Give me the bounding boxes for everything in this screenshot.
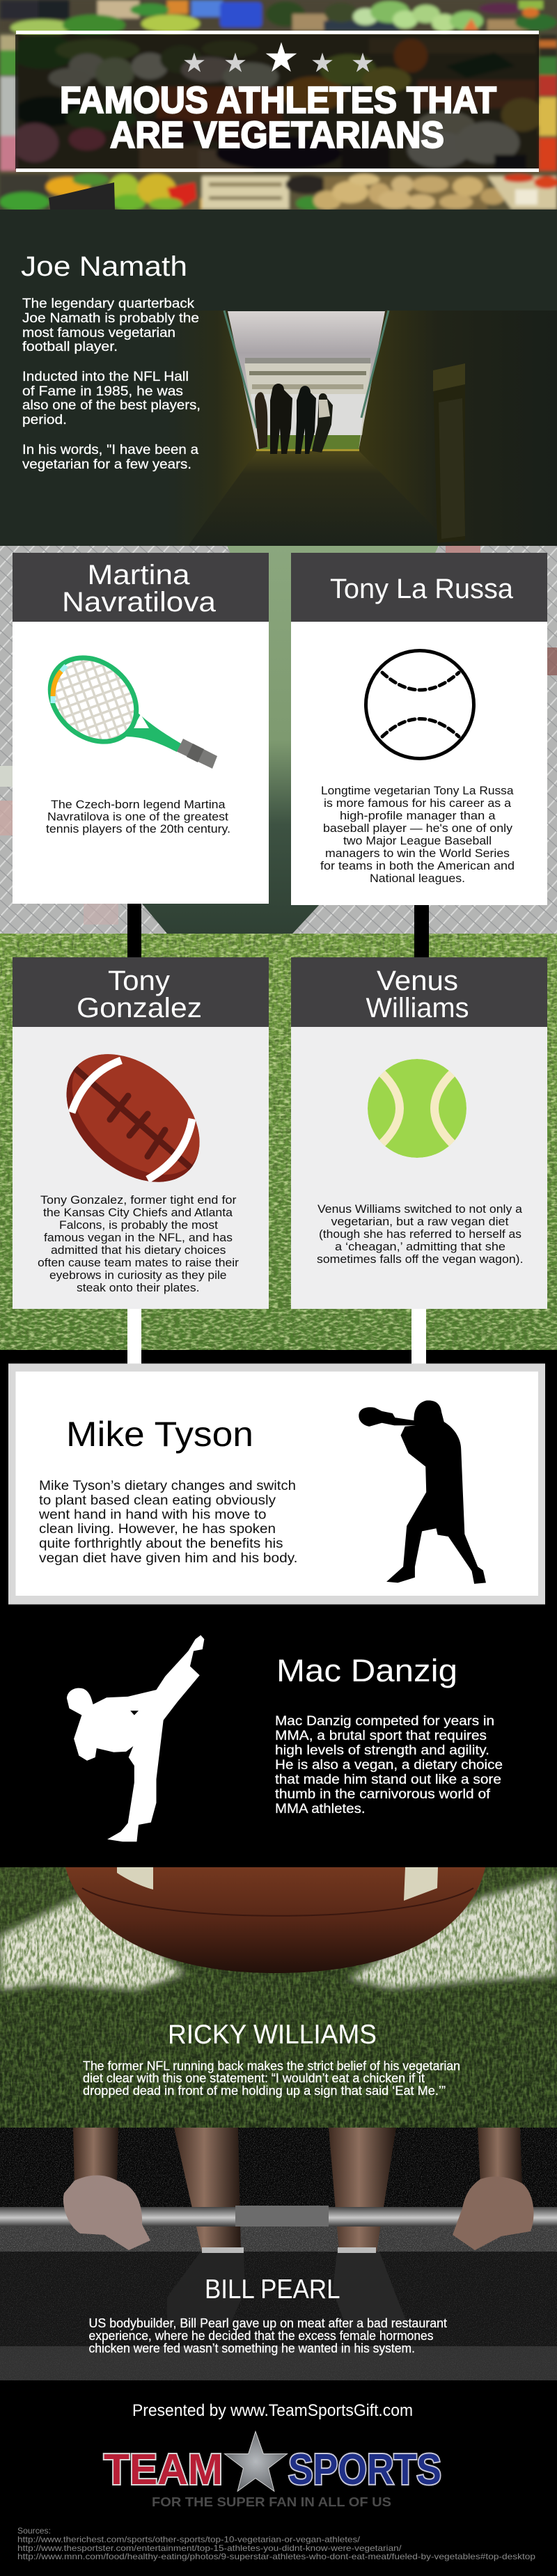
logo: Team Sports — [104, 2433, 441, 2494]
text: Martina Navratilova: The Czech-born legend Martina — [51, 799, 226, 811]
panel: footer — [0, 2380, 557, 2576]
heading: BILL PEARL — [205, 2275, 340, 2304]
text: Mac Danzig: MMA, a brutal sport that requires — [275, 1729, 487, 1743]
heading: Mac Danzig — [276, 1653, 457, 1688]
text: Tony La Russa: two Major League Baseball — [343, 835, 492, 847]
heading: Martina — [88, 560, 190, 590]
background: stadium aerial — [0, 546, 557, 934]
background: grass — [0, 934, 557, 1351]
text: Bill Pearl: experience, where he decided that the excess female hormones — [89, 2329, 433, 2343]
text: Martina Navratilova: tennis players of the 20th century. — [46, 823, 230, 835]
photo: football on turf — [0, 1867, 557, 2128]
text: Ricky Williams: dropped dead in front of me holding up a sign that said ‘Eat Me.’” — [83, 2084, 446, 2098]
sources: Sources: — [17, 2526, 51, 2536]
stars row — [184, 42, 373, 72]
text: Venus Williams: a ‘cheagan,’ admitting that she — [335, 1241, 505, 1253]
icon: football — [67, 1054, 200, 1182]
text: Venus Williams — [317, 1203, 524, 1266]
text: Joe Namath bio: vegetarian for a few years. — [22, 457, 191, 472]
presented by: Presented by www.TeamSportsGift.com — [132, 2401, 413, 2420]
heading: Venus — [377, 966, 458, 996]
title text — [60, 79, 496, 156]
posts between cards — [127, 904, 429, 958]
text: Joe Namath bio: In his words, "I have been a — [22, 443, 198, 457]
panel: Bill Pearl — [0, 2128, 557, 2380]
text: Venus Williams: (though she has referred to herself as — [319, 1228, 521, 1241]
text: Mike Tyson: went hand in hand with his move to — [38, 1508, 266, 1522]
text: Mike Tyson: to plant based clean eating obviously — [39, 1493, 276, 1508]
text: Tony La Russa: high-profile manager than a — [340, 810, 496, 822]
heading: Tony — [108, 966, 170, 996]
icon: martial artist silhouette — [67, 1635, 204, 1841]
text: Tony La Russa — [320, 785, 515, 885]
heading: Navratilova — [62, 587, 217, 618]
text: Joe Namath bio: period. — [22, 413, 67, 427]
text: Mac Danzig: high levels of strength and agility. — [275, 1743, 489, 1758]
card: Tony Gonzalez — [13, 957, 269, 1309]
sources: http://www.thesportster.com/entertainment/top-15-athletes-you-didnt-know-were-vegetarian/ — [17, 2543, 402, 2553]
icon: tennis ball — [368, 1059, 466, 1158]
text: Tony Gonzalez: Falcons, is probably the most — [59, 1219, 218, 1232]
text: Venus Williams: sometimes falls off the vegan wagon). — [317, 1253, 524, 1266]
sources — [17, 2526, 535, 2561]
title text: ARE VEGETARIANS — [110, 114, 444, 156]
panel: Mac Danzig — [67, 1635, 503, 1841]
header photo: vegetable market — [0, 0, 557, 212]
text: Tony Gonzalez: eyebrows in curiosity as they pile — [49, 1269, 227, 1282]
panel: Mike Tyson — [8, 1363, 545, 1604]
text: Joe Namath bio: most famous vegetarian — [22, 326, 175, 340]
text: Mac Danzig: Mac Danzig competed for years in — [275, 1714, 494, 1729]
text: Joe Namath bio: football player. — [22, 340, 118, 354]
text: Tony La Russa: National leagues. — [370, 872, 465, 885]
text: Bill Pearl: US bodybuilder, Bill Pearl gave up on meat after a bad restaurant — [89, 2316, 447, 2330]
text: Joe Namath bio: The legendary quarterback — [22, 297, 195, 311]
title banner overlay — [15, 31, 539, 172]
title text: FAMOUS ATHLETES THAT — [60, 79, 496, 121]
text: Joe Namath bio — [22, 297, 201, 472]
logo: Team Sports: SPORTS — [288, 2446, 441, 2494]
card: Venus Williams — [291, 957, 547, 1309]
text: Venus Williams: vegetarian, but a raw vegan diet — [331, 1216, 509, 1228]
heading — [366, 966, 469, 1023]
text: Tony La Russa: is more famous for his career as a — [324, 797, 512, 810]
text: Mac Danzig — [275, 1714, 503, 1816]
heading: Gonzalez — [77, 993, 202, 1023]
text: Tony La Russa: for teams in both the American and — [320, 860, 515, 872]
text: Mac Danzig: He is also a vegan, a dietary choice — [275, 1758, 503, 1773]
text: Tony Gonzalez: the Kansas City Chiefs and Atlanta — [43, 1207, 233, 1219]
heading: Tony La Russa — [330, 574, 514, 604]
logo: Team Sports: TEAM — [104, 2446, 223, 2494]
card: Tony La Russa — [291, 553, 547, 905]
text: Tony Gonzalez: steak onto their plates. — [77, 1282, 199, 1294]
heading: Mike Tyson — [66, 1415, 253, 1454]
text: Mike Tyson: quite forthrightly about the benefits his — [39, 1537, 283, 1551]
tagline: FOR THE SUPER FAN IN ALL OF US — [152, 2495, 391, 2509]
text: Tony Gonzalez — [38, 1194, 240, 1294]
text: Mac Danzig: thumb in the carnivorous world of — [275, 1787, 491, 1802]
icon: boxer silhouette — [359, 1401, 486, 1584]
text: Mike Tyson: vegan diet have given him and his body. — [39, 1551, 298, 1566]
text: Tony Gonzalez: Tony Gonzalez, former tight end for — [40, 1194, 237, 1207]
text: Tony La Russa: baseball player — he's one of only — [323, 822, 513, 835]
sources: http://www.therichest.com/sports/other-sports/top-10-vegetarian-or-vegan-athletes/ — [17, 2534, 361, 2544]
icon: tennis racket — [33, 641, 217, 769]
text: Mac Danzig: MMA athletes. — [275, 1802, 365, 1816]
sources: http://www.mnn.com/food/healthy-eating/photos/9-superstar-athletes-who-dont-eat-meat/fueled-by-vegetables#top-desktop — [17, 2552, 535, 2561]
text: Martina Navratilova — [46, 799, 230, 835]
text: Bill Pearl: chicken were fed wasn’t something he wanted in his system. — [89, 2341, 415, 2355]
heading: Joe Namath: Joe Namath — [21, 251, 187, 282]
text: Mike Tyson — [38, 1479, 297, 1566]
heading: RICKY WILLIAMS — [168, 2020, 377, 2050]
heading — [77, 966, 202, 1023]
text: Joe Namath bio: Joe Namath is probably the — [22, 311, 199, 326]
photo: stadium tunnel — [167, 311, 557, 546]
heading — [62, 560, 217, 618]
card: Martina Navratilova — [13, 553, 269, 904]
heading: Williams — [366, 993, 469, 1023]
text: Joe Namath bio: also one of the best players, — [22, 398, 201, 413]
panel: black background — [0, 1350, 557, 1867]
text: Mike Tyson: Mike Tyson’s dietary changes and switch — [39, 1479, 296, 1493]
text: Tony La Russa: managers to win the World Series — [325, 847, 510, 860]
text: Venus Williams: Venus Williams switched to not only a — [317, 1203, 523, 1216]
text: Ricky Williams: The former NFL running back makes the strict belief of his vegetarian — [83, 2059, 460, 2073]
panel: Ricky Williams — [0, 1867, 557, 2128]
text: Mike Tyson: clean living. However, he has spoken — [39, 1522, 276, 1537]
text: Ricky Williams — [83, 2059, 460, 2098]
text: Tony Gonzalez: famous vegan in the NFL, and has — [44, 1232, 233, 1244]
text: Mac Danzig: that made him stand out like a sore — [275, 1773, 501, 1787]
text: Joe Namath bio: Inducted into the NFL Hall — [22, 370, 189, 384]
text: Tony Gonzalez: often cause team mates to raise their — [38, 1257, 240, 1269]
icon: baseball — [366, 650, 473, 759]
text: Tony La Russa: Longtime vegetarian Tony La Russa — [321, 785, 514, 797]
text: Ricky Williams: diet clear with this one statement: “I wouldn’t eat a chicken if it — [83, 2071, 425, 2085]
text: Bill Pearl — [89, 2316, 447, 2355]
text: Martina Navratilova: Navratilova is one of the greatest — [47, 810, 228, 823]
panel: Joe Namath — [0, 210, 557, 546]
photo: barbell lifter — [0, 2128, 557, 2380]
text: Tony Gonzalez: admitted that his dietary choices — [51, 1244, 226, 1257]
text: Joe Namath bio: of Fame in 1985, he was — [22, 384, 183, 399]
white posts — [127, 1309, 426, 1364]
